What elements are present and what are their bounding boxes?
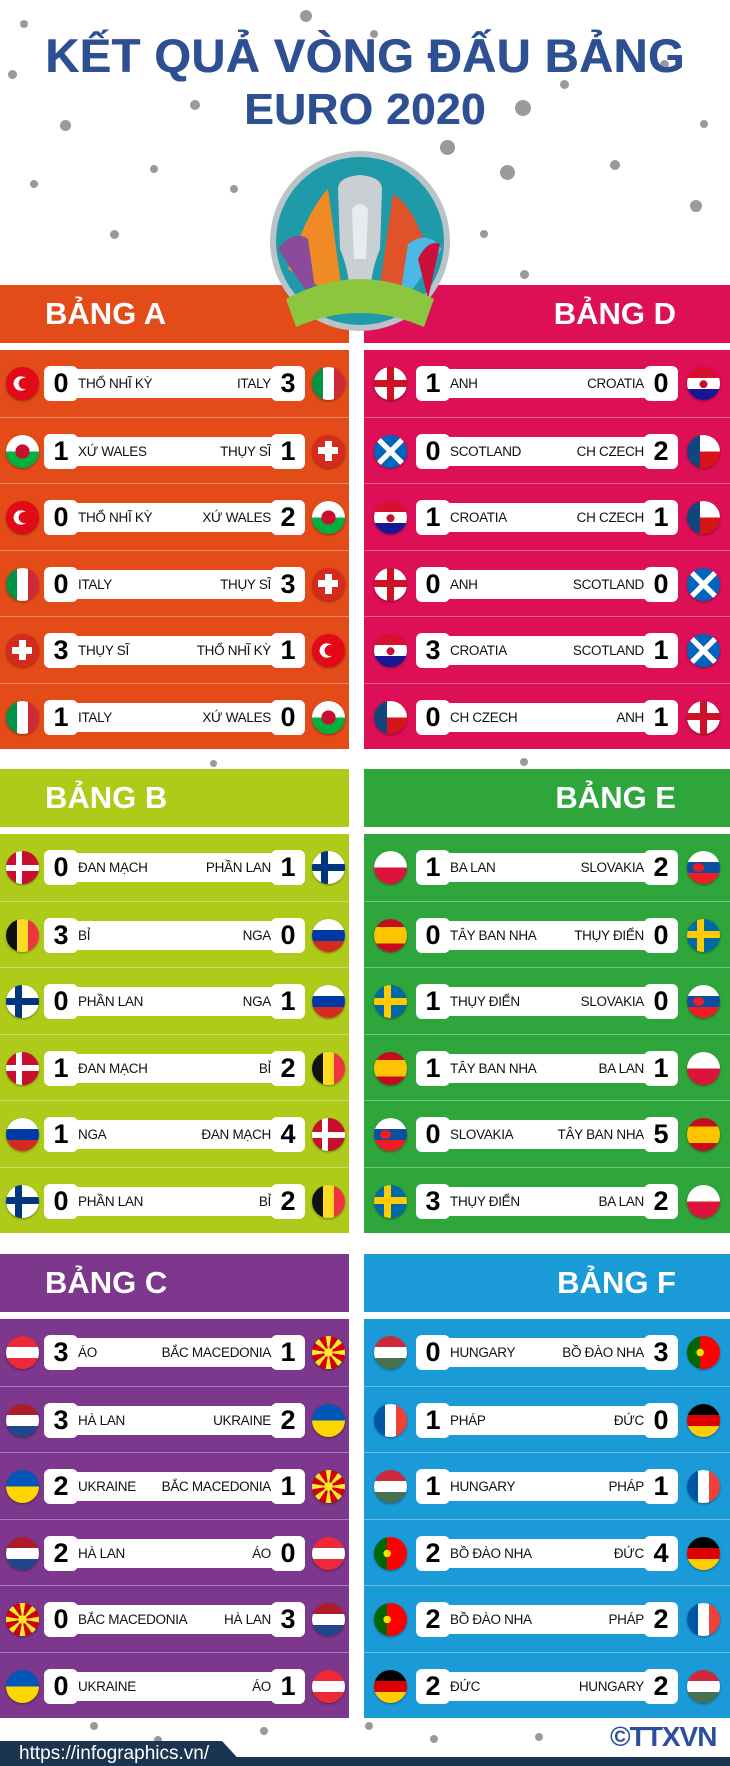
panel: group F: 2 <box>425 1604 441 1634</box>
panel: group F: ĐỨC <box>614 1412 644 1428</box>
panel: group C: BẮC MACEDONIA <box>162 1345 271 1360</box>
panel: group D: 1 <box>425 502 441 532</box>
panel: group F: 4 <box>653 1538 669 1568</box>
panel: group A: THỔ NHĨ KỲ <box>78 376 152 391</box>
panel: group F: 1 <box>425 1471 441 1501</box>
panel: group E: 3 <box>425 1186 441 1216</box>
panel: group B: ĐAN MẠCH <box>78 1060 148 1076</box>
panel: group E: 5 <box>653 1119 669 1149</box>
panel: group D: BẢNG D <box>554 296 676 331</box>
panel: group A <box>0 285 349 749</box>
panel: group D: ANH <box>450 376 478 391</box>
panel: group D: 1 <box>653 702 669 732</box>
panel: group C: BẮC MACEDONIA <box>78 1612 187 1627</box>
panel: group C: 0 <box>280 1538 296 1568</box>
panel: group C: BẮC MACEDONIA <box>162 1479 271 1494</box>
panel: group C: HÀ LAN <box>224 1612 271 1627</box>
panel: group D: 0 <box>425 702 441 732</box>
panel: group E: 2 <box>653 852 669 882</box>
panel: group F: HUNGARY <box>450 1345 515 1360</box>
panel: group F: BỒ ĐÀO NHA <box>562 1345 644 1360</box>
panel: group A: 0 <box>280 702 296 732</box>
panel: group E: SLOVAKIA <box>581 994 644 1009</box>
panel: group F: HUNGARY <box>579 1678 644 1694</box>
panel: group E: TÂY BAN NHA <box>558 1127 644 1142</box>
panel: group F: BỒ ĐÀO NHA <box>450 1546 532 1560</box>
panel: group A: THỔ NHĨ KỲ <box>78 510 152 525</box>
panel: group B: NGA <box>78 1127 106 1142</box>
panel: group C: 0 <box>53 1670 69 1700</box>
panel: group F <box>364 1254 730 1718</box>
panel: group F: 3 <box>653 1337 669 1367</box>
panel: group D: 0 <box>653 568 669 598</box>
panel: group B: BỈ <box>78 928 90 942</box>
panel: group B: 1 <box>53 1119 69 1149</box>
panel: group F: 0 <box>653 1404 669 1434</box>
panel: group F: ĐỨC <box>614 1546 644 1560</box>
panel: group E: BẢNG E <box>555 780 676 815</box>
panel: group A: 1 <box>53 702 69 732</box>
panel: group B: PHẦN LAN <box>78 994 143 1009</box>
panel: group D: SCOTLAND <box>573 643 644 658</box>
panel: group F: ĐỨC <box>450 1678 480 1694</box>
panel: group F: 1 <box>425 1404 441 1434</box>
panel: group D: CH CZECH <box>577 510 644 525</box>
panel: group C: UKRAINE <box>78 1479 136 1494</box>
panel: group C: 0 <box>53 1604 69 1634</box>
panel: group C: HÀ LAN <box>78 1412 125 1428</box>
panel: group D: 0 <box>425 436 441 466</box>
panel: group B: 2 <box>280 1186 296 1216</box>
panel: group C: 3 <box>53 1404 69 1434</box>
panel: group C: 1 <box>280 1337 296 1367</box>
panel: group E: 1 <box>425 986 441 1016</box>
panel: group E: BA LAN <box>599 1194 644 1208</box>
panel: group C: 1 <box>280 1471 296 1501</box>
panel: group D <box>364 285 730 749</box>
panel: group C: 3 <box>280 1604 296 1634</box>
panel: group A: 3 <box>280 368 296 398</box>
panel: group E: THỤY ĐIỂN <box>450 1194 520 1208</box>
panel: group E: THỤY ĐIỂN <box>574 928 644 942</box>
panel: group D: 0 <box>425 568 441 598</box>
panel: group F: PHÁP <box>608 1612 644 1627</box>
panel: group C: 2 <box>280 1404 296 1434</box>
panel: group F: 2 <box>425 1670 441 1700</box>
panel: group A: THỤY SĨ <box>220 576 271 592</box>
panel: group B <box>0 769 349 1233</box>
panel: group C: 2 <box>53 1538 69 1568</box>
panel: group C: UKRAINE <box>213 1412 271 1428</box>
panel: group F: PHÁP <box>608 1479 644 1494</box>
panel: group F: 2 <box>653 1604 669 1634</box>
panel: group A: THỤY SĨ <box>220 444 271 458</box>
panel: group E: 1 <box>425 852 441 882</box>
panel: group D: 1 <box>425 368 441 398</box>
panel: group D: 2 <box>653 436 669 466</box>
panel: group A: 0 <box>53 502 69 532</box>
panel: group F: 2 <box>653 1670 669 1700</box>
panel: group A: ITALY <box>78 576 112 592</box>
panel: group F: BỒ ĐÀO NHA <box>450 1612 532 1627</box>
panel: group E: 0 <box>425 1119 441 1149</box>
panel: group E: 0 <box>653 986 669 1016</box>
panel: group E: 1 <box>653 1052 669 1082</box>
panel: group B: 3 <box>53 920 69 950</box>
panel: group A: 1 <box>53 436 69 466</box>
logo: TTXVN: ©TTXVN <box>610 1721 716 1752</box>
panel: group B: 1 <box>53 1052 69 1082</box>
panel: group C: ÁO <box>78 1345 97 1360</box>
panel: group D: 1 <box>653 502 669 532</box>
panel: group B: PHẦN LAN <box>206 860 271 875</box>
panel: group E: SLOVAKIA <box>581 860 644 875</box>
panel: group F: PHÁP <box>450 1412 486 1428</box>
footer bar <box>0 1757 730 1766</box>
panel: group F: HUNGARY <box>450 1479 515 1494</box>
panel: group B: 0 <box>53 986 69 1016</box>
panel: group C: 3 <box>53 1337 69 1367</box>
panel: group B: NGA <box>243 928 271 942</box>
panel: group B: 2 <box>280 1052 296 1082</box>
panel: group D: CH CZECH <box>450 710 517 724</box>
panel: group E: 1 <box>425 1052 441 1082</box>
panel: group A: 3 <box>53 635 69 665</box>
panel: group B: ĐAN MẠCH <box>78 860 148 875</box>
panel: group F: 2 <box>425 1538 441 1568</box>
panel: group E: BA LAN <box>450 860 495 875</box>
panel: group B: 0 <box>53 1186 69 1216</box>
panel: group A: 2 <box>280 502 296 532</box>
panel: group C <box>0 1254 349 1718</box>
panel: group A: XỨ WALES <box>202 510 271 525</box>
panel: group F: 0 <box>425 1337 441 1367</box>
panel: group A: BẢNG A <box>45 296 166 331</box>
panel: group D: ANH <box>450 576 478 592</box>
panel: group C: HÀ LAN <box>78 1546 125 1560</box>
panel: group A: XỨ WALES <box>78 444 147 458</box>
panel: group B: 0 <box>53 852 69 882</box>
panel: group D: CH CZECH <box>577 444 644 458</box>
panel: group D: SCOTLAND <box>450 444 521 458</box>
title <box>45 29 685 134</box>
panel: group B: NGA <box>243 994 271 1009</box>
panel: group C: BẢNG C <box>45 1265 167 1300</box>
panel: group B: BẢNG B <box>45 780 167 815</box>
panel: group D: SCOTLAND <box>573 576 644 592</box>
panel: group E: TÂY BAN NHA <box>450 1060 536 1076</box>
panel: group D: 3 <box>425 635 441 665</box>
panel: group E: BA LAN <box>599 1060 644 1076</box>
panel: group F: BẢNG F <box>557 1265 676 1300</box>
panel: group C: UKRAINE <box>78 1678 136 1694</box>
panel: group A: ITALY <box>237 376 271 391</box>
panel: group E: 2 <box>653 1186 669 1216</box>
panel: group B: ĐAN MẠCH <box>201 1127 271 1142</box>
panel: group E: SLOVAKIA <box>450 1127 513 1142</box>
logo: euro 2020 trophy <box>270 151 450 331</box>
panel: group B: BỈ <box>259 1060 271 1076</box>
panel: group A: 1 <box>280 436 296 466</box>
panel: group D: CROATIA <box>587 376 644 391</box>
panel: group E: 0 <box>653 920 669 950</box>
panel: group C: 1 <box>280 1670 296 1700</box>
panel: group E: TÂY BAN NHA <box>450 928 536 942</box>
panel: group D: CROATIA <box>450 510 507 525</box>
footer url: https://infographics.vn/ <box>19 1743 209 1764</box>
panel: group F: 1 <box>653 1471 669 1501</box>
panel: group D: ANH <box>616 710 644 724</box>
panel: group A: ITALY <box>78 710 112 724</box>
panel: group B: 1 <box>280 852 296 882</box>
panel: group E <box>364 769 730 1233</box>
panel: group A: 1 <box>280 635 296 665</box>
panel: group A: 0 <box>53 368 69 398</box>
panel: group B: 0 <box>280 920 296 950</box>
panel: group C: ÁO <box>252 1678 271 1694</box>
panel: group B: 4 <box>280 1119 296 1149</box>
panel: group E: THỤY ĐIỂN <box>450 994 520 1009</box>
panel: group D: 1 <box>653 635 669 665</box>
panel: group A: XỨ WALES <box>202 710 271 724</box>
panel: group A: 0 <box>53 568 69 598</box>
panel: group B: 1 <box>280 986 296 1016</box>
title: EURO 2020 <box>244 85 486 134</box>
panel: group C: ÁO <box>252 1546 271 1560</box>
title: KẾT QUẢ VÒNG ĐẤU BẢNG <box>45 29 685 82</box>
panel: group B: PHẦN LAN <box>78 1194 143 1208</box>
panel: group B: BỈ <box>259 1194 271 1208</box>
panel: group D: CROATIA <box>450 643 507 658</box>
panel: group D: 0 <box>653 368 669 398</box>
panel: group A: THỔ NHĨ KỲ <box>197 643 271 658</box>
panel: group A: 3 <box>280 568 296 598</box>
panel: group C: 2 <box>53 1471 69 1501</box>
panel: group A: THỤY SĨ <box>78 643 129 658</box>
panel: group E: 0 <box>425 920 441 950</box>
